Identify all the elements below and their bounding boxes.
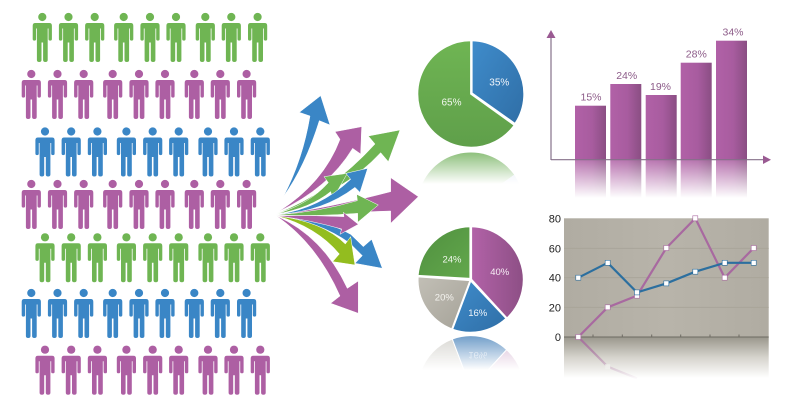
pie chart: 40 / 16 / 20 / 24 xyxy=(418,227,523,372)
arrow: small purple xyxy=(276,212,358,234)
blue series xyxy=(576,260,756,295)
x axis with arrow xyxy=(551,156,771,164)
purple series reflection xyxy=(578,337,637,378)
row 5: green people xyxy=(35,233,270,282)
bar value labels xyxy=(580,26,744,104)
y axis labels: 0 xyxy=(555,332,561,344)
arrow: large purple right xyxy=(276,178,418,223)
pie reflection xyxy=(426,336,518,368)
y axis labels: 20 xyxy=(549,302,561,314)
row 3: blue people xyxy=(35,127,270,176)
fan of diverging arrows xyxy=(276,96,418,313)
label 16%: 16% xyxy=(468,308,488,319)
label 24%: 24% xyxy=(442,254,462,266)
bar chart xyxy=(546,26,771,198)
arrow: blue down right xyxy=(276,216,382,268)
pie slices xyxy=(418,41,524,147)
x axis with ticks xyxy=(564,334,769,337)
plot reflection xyxy=(564,337,769,378)
arrow: green right xyxy=(276,194,378,222)
arrow: green long xyxy=(277,130,400,213)
bar value labels: 34% xyxy=(722,26,744,38)
arrow: lime down xyxy=(276,216,355,265)
y axis with arrow xyxy=(546,30,556,160)
bar reflections xyxy=(575,160,747,198)
row 2: purple people xyxy=(22,70,256,119)
plot area xyxy=(564,218,769,337)
line chart xyxy=(549,213,769,378)
y axis labels: 60 xyxy=(549,243,561,255)
pie chart: 65 / 35 xyxy=(418,41,524,186)
arrow: small green xyxy=(277,173,347,214)
arrow: blue up xyxy=(283,96,330,197)
label 40%: 40% xyxy=(490,267,510,278)
bar value labels: 24% xyxy=(616,70,637,82)
purple series xyxy=(576,216,756,340)
pie slices xyxy=(418,227,523,332)
label 65%: 65% xyxy=(441,98,462,108)
y axis labels: 40 xyxy=(549,273,561,285)
bar value labels: 19% xyxy=(650,81,671,93)
row 4: purple people xyxy=(22,180,256,229)
label 35%: 35% xyxy=(489,78,509,88)
reflected label 16%: 16% xyxy=(468,349,488,360)
row 1: green people xyxy=(33,13,267,62)
row 7: purple people xyxy=(35,346,270,395)
row 6: blue people xyxy=(22,289,256,338)
bars xyxy=(575,41,747,160)
arrow: small blue xyxy=(278,168,368,214)
bar value labels: 28% xyxy=(686,48,707,60)
label 20%: 20% xyxy=(435,292,454,304)
y axis labels: 80 xyxy=(549,213,561,225)
arrow: purple up right xyxy=(278,127,362,212)
bar value labels: 15% xyxy=(580,92,602,104)
people pictogram grid xyxy=(22,13,270,395)
arrow: purple down xyxy=(276,216,358,313)
pie reflection xyxy=(424,152,515,182)
y axis labels xyxy=(549,213,561,344)
